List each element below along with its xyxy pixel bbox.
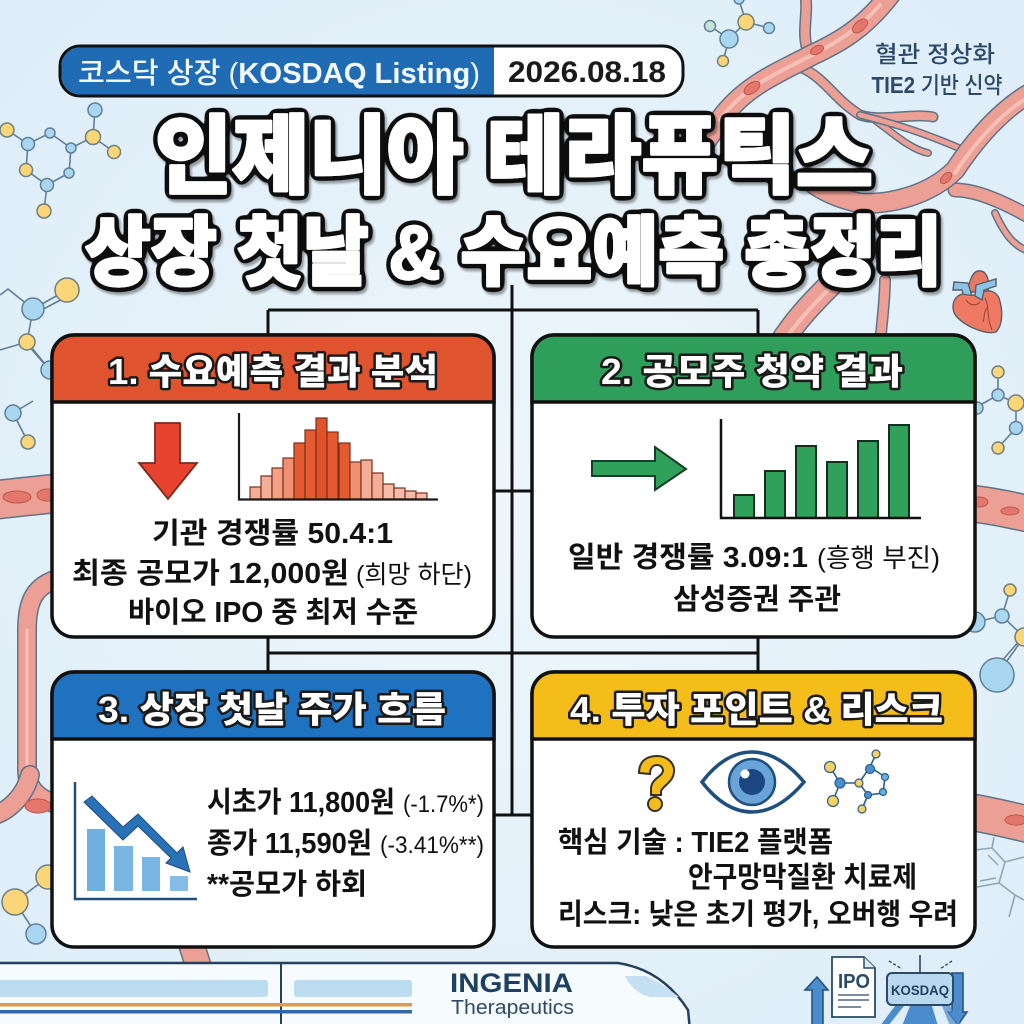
molecule: left middle	[0, 278, 79, 449]
panel 2 header: 2. 공모주 청약 결과	[601, 351, 903, 392]
icon: heart	[953, 271, 1002, 333]
tagline: top right: 혈관 정상화	[875, 41, 995, 67]
blood vessels: upper right	[700, 0, 1024, 345]
panel 1 text: 최종 공모가 12,000원	[72, 557, 349, 590]
icon: red down arrow	[139, 423, 197, 499]
panel 3: first-day price	[52, 672, 494, 947]
panel 1 header	[52, 335, 494, 402]
blood vessels: right	[965, 497, 1024, 826]
blood vessels: left and bottom	[0, 489, 199, 968]
panel 3 text: 종가 11,590원	[207, 827, 372, 860]
faint hexagon molecule: lower right	[975, 837, 1024, 917]
panel 1 text: 바이오 IPO 중 최저 수준	[128, 596, 418, 629]
panel 3 text: (-3.41%**)	[380, 832, 484, 859]
panel 2: subscription	[532, 335, 975, 637]
panel 3 text: 시초가 11,800원	[207, 786, 395, 819]
panel 1 text: (희망 하단)	[356, 561, 472, 589]
icon: KOSDAQ tower: KOSDAQ	[891, 982, 949, 998]
badge date: 2026.08.18	[508, 56, 666, 89]
panel 3 header: 3. 상장 첫날 주가 흐름	[98, 689, 446, 730]
icon: IPO document: IPO	[838, 971, 870, 993]
bar chart	[721, 419, 921, 518]
title	[85, 109, 942, 296]
panel 2 text: 삼성증권 주관	[673, 583, 841, 616]
panel 2 header	[532, 335, 975, 402]
tagline: top right: TIE2 기반 신약	[872, 72, 1002, 98]
logo: INGENIA Therapeutics: Therapeutics	[451, 997, 574, 1019]
panel 3 text: (-1.7%*)	[403, 791, 484, 818]
panel 4 text	[558, 826, 958, 931]
falling price chart	[75, 782, 197, 899]
panel 3 text: **공모가 하회	[207, 868, 367, 901]
histogram	[239, 413, 438, 500]
molecule: left lower	[2, 865, 60, 944]
icon: up arrow	[805, 977, 828, 1024]
panel 3 header	[52, 672, 494, 739]
title: 상장 첫날 & 수요예측 총정리	[85, 211, 942, 296]
panel 2 text	[568, 541, 940, 616]
badge label: 코스닥 상장 (KOSDAQ Listing)	[78, 58, 480, 90]
icon: IPO document	[832, 957, 875, 1017]
panel 4 text: 핵심 기술 : TIE2 플랫폼	[558, 826, 833, 859]
panel 1 text	[72, 517, 472, 629]
icon: eye	[702, 752, 804, 812]
tagline: top right	[872, 41, 1002, 98]
connector lines	[268, 285, 758, 815]
panel 4 text: 안구망막질환 치료제	[688, 861, 917, 894]
panel 4: investment points and risks	[532, 672, 975, 947]
title: 인제니아 테라퓨틱스	[155, 109, 873, 205]
panel 2 text: (흥행 부진)	[817, 543, 940, 573]
panel 4 header: 4. 투자 포인트 & 리스크	[570, 689, 943, 730]
molecule: right lower	[965, 584, 1024, 692]
panel 4 header	[532, 672, 975, 739]
logo: INGENIA Therapeutics: INGENIA	[450, 968, 573, 998]
molecule: right middle	[971, 366, 1024, 454]
panel 4 text: 리스크: 낮은 초기 평가, 오버행 우려	[558, 898, 958, 931]
molecule: top center	[704, 0, 774, 66]
icon: KOSDAQ tower	[880, 955, 962, 1024]
icon: molecule	[824, 750, 888, 813]
panel 1: demand forecast	[52, 335, 494, 637]
panel 1 header: 1. 수요예측 결과 분석	[108, 351, 438, 392]
icon: question mark	[639, 756, 674, 811]
panel 2 text: 일반 경쟁률 3.09:1	[568, 541, 808, 574]
logo: INGENIA Therapeutics	[450, 968, 574, 1019]
badge: listing date	[60, 46, 683, 96]
train with company logo	[0, 963, 690, 1024]
icon: green right arrow	[592, 447, 686, 490]
panel 1 text: 기관 경쟁률 50.4:1	[152, 517, 393, 550]
icons: IPO document and KOSDAQ board	[805, 955, 967, 1024]
panel 3 text	[207, 786, 484, 901]
molecule: top left	[0, 103, 120, 218]
icon: down arrow	[948, 973, 967, 1024]
